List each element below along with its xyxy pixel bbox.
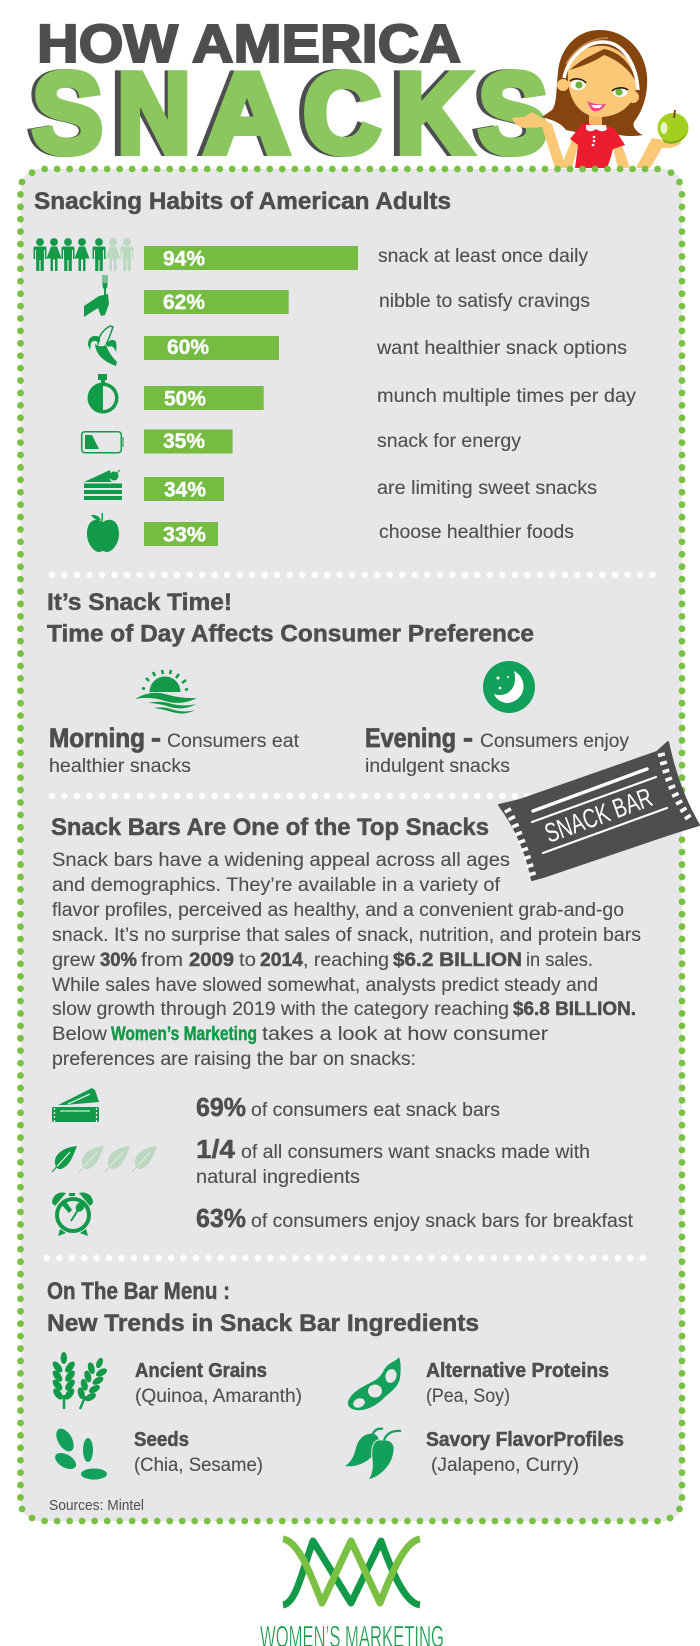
title: How America Snacks: K <box>396 50 472 178</box>
text block: evening: - <box>463 723 473 753</box>
bar: 94 percent: 94% <box>163 248 205 270</box>
text block: snack bars paragraph: 2009 <box>189 950 234 971</box>
icon: pea pod <box>348 1357 401 1410</box>
text block: evening: Consumers enjoy <box>480 731 630 752</box>
heading: snack bars: Snack Bars Are One of the Top Snacks <box>51 814 489 841</box>
text block: seeds: Seeds <box>134 1429 189 1451</box>
text block: snack bars paragraph: slow growth through 2019 with the category reaching <box>52 999 509 1020</box>
text block: morning: Consumers eat <box>167 731 300 752</box>
label: healthier options: want healthier snack options <box>376 338 627 359</box>
stat: 69 percent: of consumers eat snack bars <box>251 1100 500 1121</box>
icon: apple <box>87 513 119 552</box>
stat: one quarter: of all consumers want snacks made with <box>241 1142 590 1163</box>
icon: chili peppers <box>345 1429 401 1480</box>
icon: banana <box>88 326 117 366</box>
text block: snack bars paragraph: Women’s Marketing <box>111 1024 257 1045</box>
label: cravings: nibble to satisfy cravings <box>379 291 590 312</box>
label: snack daily: snack at least once daily <box>378 246 588 267</box>
icon: moon <box>483 661 535 713</box>
title: How America Snacks: N <box>117 50 191 178</box>
title: How America Snacks: A <box>199 50 287 178</box>
text block: snack bars paragraph: 2014 <box>260 950 303 971</box>
stat: one quarter <box>196 1134 590 1188</box>
panel: main grey panel with dotted border <box>19 169 683 1521</box>
bar: 94 percent <box>144 246 358 270</box>
bar: 62 percent: 62% <box>163 291 205 314</box>
text block: evening <box>365 723 630 777</box>
bar: 50 percent: 50% <box>164 388 206 410</box>
title: How America Snacks: A <box>204 50 290 178</box>
title: How America Snacks: S <box>32 50 103 178</box>
bar: 33 percent: 33% <box>163 524 206 546</box>
stat: 69 percent: 69% <box>196 1092 246 1122</box>
text block: snack bars paragraph <box>52 850 641 1070</box>
text block: snack bars paragraph: from <box>141 950 183 971</box>
text block: snack bars paragraph: , reaching <box>303 950 389 971</box>
bar: 34 percent <box>144 477 224 502</box>
heading: snack time: It’s Snack Time! <box>47 589 232 616</box>
text block: savory flavor profiles: (Jalapeno, Curry) <box>431 1455 579 1476</box>
bar: 60 percent <box>144 336 279 360</box>
text block: snack bars paragraph: 30% <box>100 950 137 971</box>
icon: alarm clock <box>52 1192 93 1236</box>
text block: ancient grains: Ancient Grains <box>135 1360 267 1382</box>
text block: alternative proteins: (Pea, Soy) <box>426 1386 510 1407</box>
text block: snack bars paragraph: $6.2 BILLION <box>393 950 522 971</box>
text block: evening: Evening <box>365 723 456 753</box>
icon: seeds <box>52 1426 107 1480</box>
icon: two snack bars <box>52 1088 99 1122</box>
text block: snack bars paragraph: snack. It’s no surprise that sales of snack, nutrition, and protein bars <box>52 925 641 946</box>
label: limiting sweets: are limiting sweet snacks <box>377 478 597 499</box>
icon: snack bar wrapper <box>499 742 699 880</box>
text block: snack bars paragraph: Snack bars have a widening appeal across all ages <box>52 850 510 871</box>
text block: evening: indulgent snacks <box>365 756 510 777</box>
icon: stopwatch <box>88 374 118 414</box>
text block: savory flavor profiles <box>426 1429 624 1476</box>
heading: on the bar menu <box>47 1278 479 1337</box>
heading: snack time: Time of Day Affects Consumer Preference <box>47 620 534 648</box>
text block: snack bars paragraph: to <box>239 950 256 971</box>
icon: wheat <box>51 1352 113 1414</box>
stat: one quarter: natural ingredients <box>196 1167 360 1188</box>
stat: one quarter: 1/4 <box>196 1134 236 1164</box>
bar: 50 percent <box>144 386 264 410</box>
bar: 35 percent: 35% <box>163 430 205 453</box>
icon: people 94 percent <box>34 238 134 271</box>
stat: 63 percent <box>196 1203 634 1233</box>
text block: savory flavor profiles: Savory FlavorProfiles <box>426 1429 624 1451</box>
icon: battery <box>82 432 124 453</box>
heading: on the bar menu: On The Bar Menu : <box>47 1278 230 1305</box>
text block: snack bars paragraph: takes a look at how consumer <box>262 1024 549 1045</box>
title: How America Snacks: S <box>478 50 548 178</box>
bar: 34 percent: 34% <box>164 478 206 502</box>
bar: 35 percent <box>144 430 233 454</box>
illustration: woman holding an apple <box>512 30 688 168</box>
label: multiple times: munch multiple times per day <box>377 386 637 407</box>
title: How America Snacks <box>28 14 548 178</box>
icon: sunrise <box>135 670 197 714</box>
title: How America Snacks: K <box>390 50 468 178</box>
title: How America Snacks: N <box>111 50 189 178</box>
icon: cake slice <box>84 470 122 500</box>
text block: morning: Morning <box>49 723 145 753</box>
text block: seeds: (Chia, Sesame) <box>134 1455 263 1476</box>
text block: snack bars paragraph: Below <box>52 1024 107 1045</box>
text block: morning: healthier snacks <box>49 756 191 777</box>
text block: seeds <box>134 1429 263 1476</box>
text block: morning <box>49 723 300 777</box>
title: How America Snacks: C <box>303 50 381 178</box>
stat: 69 percent <box>196 1092 500 1122</box>
stat: 63 percent: of consumers enjoy snack bars for breakfast <box>251 1211 634 1232</box>
text block: snack bars paragraph: in sales. <box>526 950 593 971</box>
text block: snack bars paragraph: flavor profiles, perceived as healthy, and a convenient grab-and-go <box>52 900 624 921</box>
text block: alternative proteins: Alternative Proteins <box>426 1360 609 1382</box>
text: sources: Sources: Mintel <box>49 1498 144 1514</box>
text block: snack bars paragraph: While sales have slowed somewhat, analysts predict steady and <box>52 975 598 996</box>
heading: snacking habits: Snacking Habits of American Adults <box>34 188 451 215</box>
heading: snack time <box>47 589 534 648</box>
title: How America Snacks: S <box>473 50 545 178</box>
title: How America Snacks: C <box>298 50 376 178</box>
title: How America Snacks: S <box>28 50 102 178</box>
bar: 33 percent <box>144 522 218 546</box>
text block: ancient grains <box>135 1360 302 1407</box>
stat: 63 percent: 63% <box>196 1203 246 1233</box>
text block: snack bars paragraph: and demographics. They’re available in a variety of <box>52 875 501 896</box>
icon: leaves one of four <box>52 1146 157 1172</box>
heading: on the bar menu: New Trends in Snack Bar Ingredients <box>47 1310 479 1337</box>
text block: snack bars paragraph: preferences are raising the bar on snacks: <box>52 1049 416 1070</box>
text block: ancient grains: (Quinoa, Amaranth) <box>135 1386 302 1407</box>
label: healthier foods: choose healthier foods <box>379 522 574 543</box>
logo: womens marketing <box>260 1539 444 1646</box>
bar: 62 percent <box>144 290 289 314</box>
text block: snack bars paragraph: $6.8 BILLION. <box>513 999 636 1020</box>
label: energy: snack for energy <box>377 431 522 452</box>
text block: snack bars paragraph: grew <box>52 950 95 971</box>
title: How America Snacks: HOW AMERICA <box>37 14 461 74</box>
text block: morning: - <box>151 723 161 753</box>
icon: snack bar wrapper: SNACK BAR <box>541 782 656 849</box>
bar: 60 percent: 60% <box>167 336 209 359</box>
icon: hand with fork <box>84 275 109 317</box>
text block: alternative proteins <box>426 1360 609 1407</box>
